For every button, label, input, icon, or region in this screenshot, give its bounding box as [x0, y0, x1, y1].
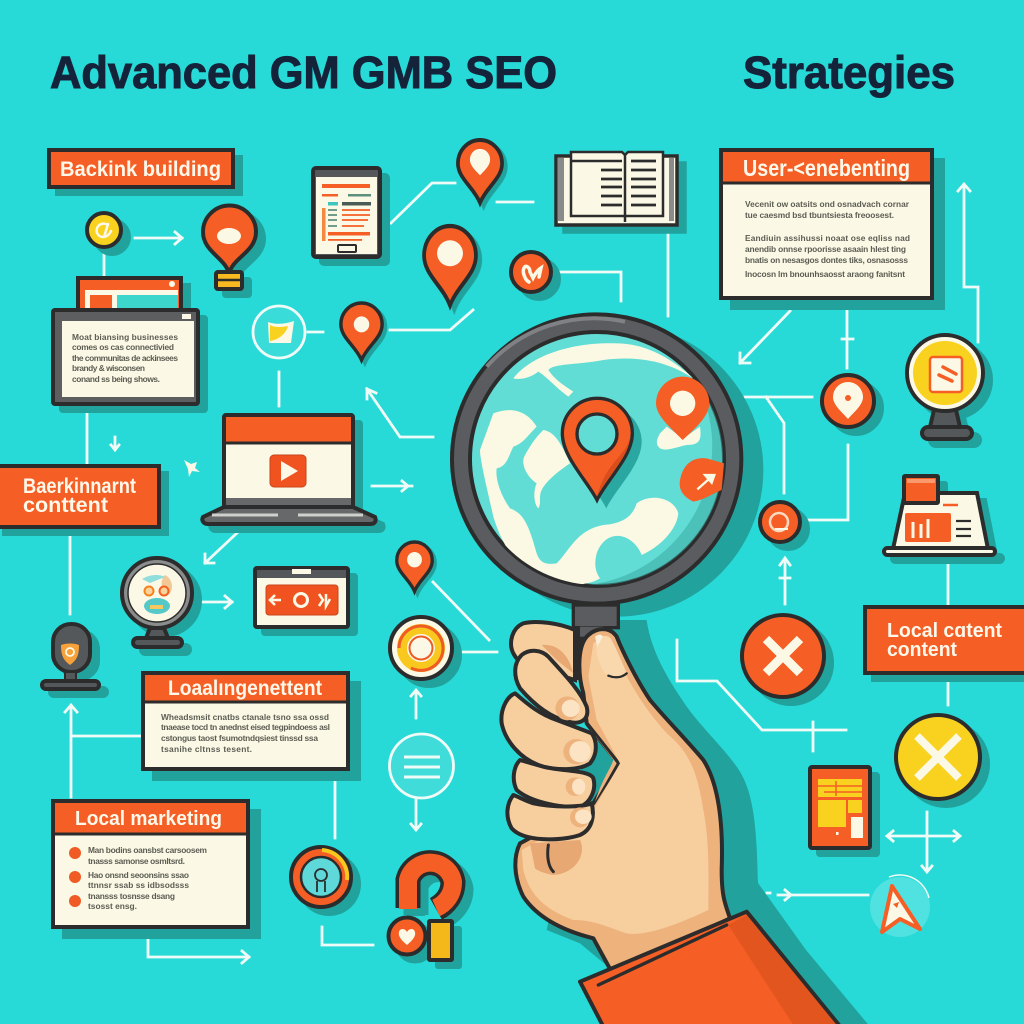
icon: keyhole badge	[291, 847, 351, 907]
panel: local marketing card: Local marketing	[75, 807, 222, 830]
icon: media window	[255, 568, 348, 627]
icon: open book	[556, 152, 677, 225]
icon: yellow coin	[87, 213, 121, 247]
ring	[452, 314, 741, 604]
panel: local content label	[865, 607, 1024, 673]
illustration: hand holding magnifier	[501, 605, 870, 1024]
panel: user engagement card: Vecenit ow oatsits ond osnadvach cornar	[745, 199, 910, 209]
icon: webcam	[42, 624, 99, 689]
panel: browser text window: conand ss being shows.	[72, 374, 160, 384]
icon: navigation triangle	[870, 875, 930, 937]
panel: browser text window: brandy & wisconsen	[72, 363, 145, 373]
connector lines and arrows	[65, 183, 978, 963]
icon: orange pin badge	[822, 375, 874, 427]
panel: local content label: Local cɑtent	[887, 620, 1002, 642]
panel: local engagement card: Wheadsmsit cnatbs ctanale tsno ssa ossd	[161, 712, 329, 722]
panel: user engagement card: anendib onnse rpoorisse asaain hlest ting	[745, 244, 906, 254]
panel: browser text window: Moat biansing businesses	[72, 332, 178, 342]
icon: laptop with play button	[202, 415, 376, 524]
icon: yellow block	[429, 921, 452, 960]
panel: user engagement card: Eandiuin assihussi noaat ose eqliss nad	[745, 233, 910, 243]
icon: yellow badge on stand	[907, 335, 983, 439]
panel: browser text window: the communitas de ackinsees	[72, 353, 178, 363]
panel: local marketing card: tnansss tosnsse dsang	[88, 891, 175, 901]
panel: local marketing card: tsosst ensg.	[88, 901, 137, 911]
icon: map pin near hand	[397, 542, 432, 591]
panel: user engagement card: Inocosn lm bnounhsaosst araong fanitsnt	[745, 269, 905, 279]
panel: browser text window	[53, 310, 198, 404]
title: Strategies	[743, 47, 955, 98]
icon: target ring badge	[390, 617, 452, 679]
panel: local engagement card: tnaease tocd tn anednst eised tegpindoess asl	[161, 722, 330, 732]
map pin center	[572, 407, 642, 508]
icon: orange tablet	[810, 767, 870, 848]
panel: user engagement card: User-<enebenting	[743, 155, 910, 181]
panel: user engagement card: tue caesmd bsd tbuntsiesta freoosest.	[745, 210, 894, 220]
title: Advanced GM GMB SEO	[50, 47, 557, 98]
panel: local engagement card: Loaalıngenettent	[168, 677, 322, 700]
back finger	[511, 622, 575, 680]
palm crease	[530, 840, 582, 875]
shadow: magnifier	[470, 323, 763, 617]
panel: local marketing card: ttnnsr ssab ss idbsodsss	[88, 880, 189, 890]
panel: backlink internal content label	[0, 466, 159, 527]
panel: local content label: content	[887, 639, 957, 661]
arrow tag	[680, 458, 724, 502]
icon: circled list	[390, 734, 454, 798]
icon: light bulb	[203, 206, 256, 289]
icon: heart badge	[388, 918, 426, 954]
panel: user engagement card: bnatis on nesasgos dontes tiks, osnasosss	[745, 255, 908, 265]
panel: browser text window: comes os cas connectivied	[72, 342, 174, 352]
icon: magnet	[408, 863, 453, 909]
panel: user engagement card	[721, 150, 932, 298]
icon: star spark	[184, 460, 200, 477]
panel: local marketing card	[53, 801, 248, 927]
panel: backlink building label	[49, 150, 233, 187]
icon: magnifying glass	[452, 314, 763, 617]
panel: local marketing card: Hao onsnd seoonsins ssao	[88, 870, 189, 880]
panel: backlink internal content label: conttent	[23, 494, 108, 517]
icon: map pin small	[341, 303, 382, 360]
shadow: hand	[547, 620, 870, 1024]
icon: yellow cross circle	[896, 715, 980, 799]
icon: map pin top	[458, 140, 502, 203]
icon: small heart badge	[511, 252, 551, 292]
map inside the lens	[480, 343, 725, 586]
panel: local marketing card: tnasss samonse osmltsrd.	[88, 856, 185, 866]
icon: circled note	[253, 306, 305, 358]
icon: dashboard device	[884, 476, 995, 555]
panel: backlink internal content label: Baerkinnarnt	[23, 475, 136, 498]
panel: backlink building label: Backink building	[60, 157, 221, 181]
panel: local engagement card: tsanihe cltnss tesent.	[161, 744, 252, 754]
icon: globe on stand	[122, 558, 192, 647]
icon: back browser window	[78, 278, 181, 318]
icon: map pin large	[424, 226, 476, 305]
panel: local marketing card: Man bodins oansbst carsoosem	[88, 845, 207, 855]
map pin right	[656, 377, 709, 440]
sleeve	[580, 912, 840, 1024]
title	[50, 47, 955, 98]
icon: tablet document	[313, 168, 380, 257]
handle	[573, 605, 618, 628]
fingers	[515, 651, 587, 723]
panel: local engagement card	[143, 673, 348, 769]
icon: red cross circle	[742, 615, 824, 697]
panel: local engagement card: cstongus taost fsumotndqsiest tinssd ssa	[161, 733, 318, 743]
icon: small orange search badge	[760, 502, 800, 542]
palm and thumb	[515, 629, 730, 975]
